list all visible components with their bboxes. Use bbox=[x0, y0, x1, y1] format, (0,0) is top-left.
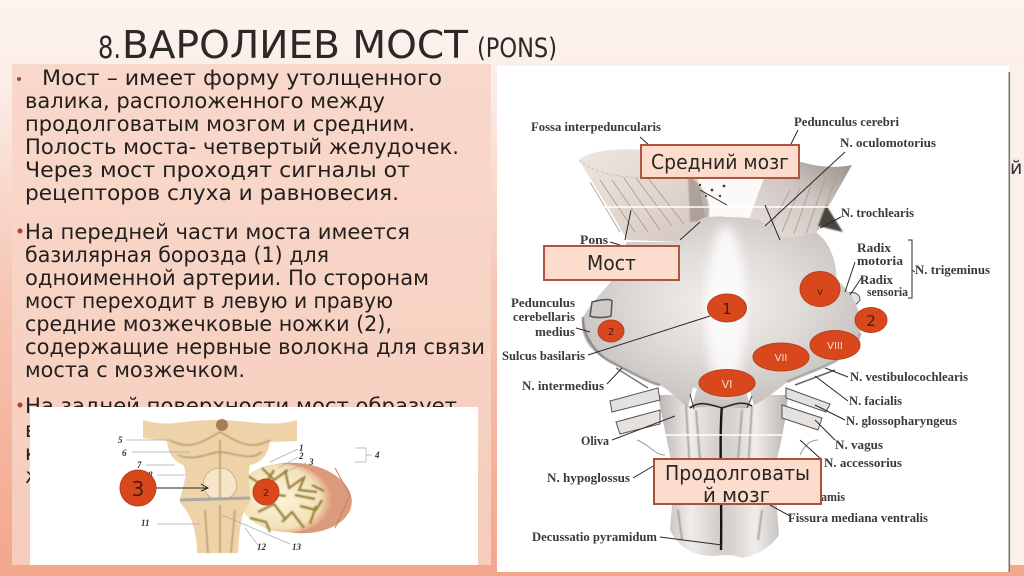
paragraph: posterior part: в bbox=[25, 418, 37, 442]
callout 2 right bbox=[855, 308, 887, 332]
latin labels: N. vestibulocochlearis bbox=[850, 369, 968, 384]
leader lines bbox=[576, 130, 915, 545]
number labels: 5 bbox=[118, 435, 123, 445]
paragraph: form of the pons: валика, расположенного между bbox=[25, 89, 385, 113]
latin labels: Radix bbox=[857, 240, 892, 255]
paragraph: anterior part: На передней части моста имеется bbox=[25, 220, 410, 244]
callout 2 bbox=[253, 479, 279, 505]
callout 2 left bbox=[598, 320, 624, 342]
panel: posterior brainstem image bbox=[30, 407, 478, 565]
number labels: 6 bbox=[122, 448, 127, 458]
label: pons bbox=[544, 246, 679, 280]
latin labels: N. oculomotorius bbox=[840, 135, 936, 150]
callout 2 left: 2 bbox=[608, 327, 614, 338]
number labels: 3 bbox=[308, 457, 314, 467]
paragraph: form of the pons: рецепторов слуха и равновесия. bbox=[25, 181, 399, 205]
latin labels: N. intermedius bbox=[522, 378, 604, 393]
paragraph: anterior part: моста с мозжечком. bbox=[25, 358, 245, 382]
latin labels: Fossa interpeduncularis bbox=[531, 119, 661, 134]
latin labels: N. accessorius bbox=[824, 455, 902, 470]
latin labels: Sulcus basilaris bbox=[502, 348, 585, 363]
number labels: 2 bbox=[298, 451, 304, 461]
number labels: 7 bbox=[137, 460, 142, 470]
cranial nerve roots bbox=[610, 292, 860, 455]
latin labels: sensoria bbox=[867, 284, 908, 299]
label: midbrain bbox=[641, 145, 799, 178]
label: medulla oblongata: Продолговаты bbox=[665, 461, 810, 485]
paragraph: posterior part bbox=[18, 394, 457, 488]
callout VI bbox=[699, 370, 755, 396]
paragraph: form of the pons: Через мост проходят сигналы от bbox=[25, 158, 410, 182]
latin labels: Radix bbox=[860, 272, 893, 287]
midbrain peduncles bbox=[579, 149, 852, 242]
paragraph: posterior part: На задней поверхности мост образует bbox=[25, 394, 457, 418]
latin labels: N. hypoglossus bbox=[547, 470, 630, 485]
paragraph: anterior part: одноименной артерии. По сторонам bbox=[25, 266, 429, 290]
paragraph: form of the pons: Мост – имеет форму утолщенного bbox=[42, 66, 442, 90]
paragraph: form of the pons: продолговатым мозгом и средним. bbox=[25, 112, 415, 136]
panel: description text bbox=[12, 64, 491, 565]
number labels bbox=[118, 435, 380, 552]
paragraph: anterior part bbox=[18, 220, 485, 382]
latin labels: medius bbox=[535, 324, 575, 339]
latin labels: Fissura mediana ventralis bbox=[788, 510, 928, 525]
paragraph: form of the pons: Полость моста- четвертый желудочек. bbox=[25, 135, 459, 159]
latin labels: motoria bbox=[857, 253, 904, 268]
callout V: v bbox=[817, 287, 823, 298]
paragraph: anterior part: содержащие нервные волокна для связи bbox=[25, 335, 485, 359]
paragraph: anterior part: мост переходит в левую и правую bbox=[25, 289, 393, 313]
callout VI: VI bbox=[722, 378, 732, 391]
latin labels bbox=[502, 114, 990, 544]
callout 2: 2 bbox=[263, 488, 269, 499]
paragraph: form of the pons bbox=[17, 66, 459, 205]
number labels: 12 bbox=[257, 542, 266, 552]
latin labels: Pedunculus cerebri bbox=[794, 114, 899, 129]
latin labels: Pedunculus bbox=[511, 295, 575, 310]
label: medulla oblongata bbox=[654, 459, 821, 507]
latin labels: Pons bbox=[580, 232, 608, 247]
latin labels: N. glossopharyngeus bbox=[846, 413, 957, 428]
callout VIII: VIII bbox=[827, 341, 843, 352]
callout VII bbox=[753, 343, 809, 371]
latin labels: Decussatio pyramidum bbox=[532, 529, 657, 544]
paragraph: anterior part: средние мозжечковые ножки (2), bbox=[25, 312, 392, 336]
callout 1 bbox=[708, 294, 746, 322]
latin labels: cerebellaris bbox=[513, 309, 575, 324]
latin labels: amis bbox=[821, 489, 845, 504]
number labels: 8 bbox=[148, 470, 153, 480]
title: 8. bbox=[98, 31, 121, 66]
callout V bbox=[800, 272, 840, 306]
clipped text fragment: й bbox=[1010, 157, 1022, 179]
cerebellum bbox=[235, 457, 355, 539]
callout 2 right: 2 bbox=[866, 312, 876, 330]
latin labels: N. facialis bbox=[849, 393, 902, 408]
medulla oblongata bbox=[658, 395, 788, 558]
title: (PONS) bbox=[477, 33, 557, 64]
latin labels: N. trigeminus bbox=[915, 262, 990, 277]
label: medulla oblongata: й мозг bbox=[703, 483, 770, 507]
callout 3 bbox=[120, 470, 156, 506]
callout 3: 3 bbox=[132, 477, 144, 501]
paragraph: posterior part: ж bbox=[25, 464, 44, 488]
number labels: 11 bbox=[141, 518, 150, 528]
white scan lines bbox=[590, 207, 830, 435]
paragraph: anterior part: базилярная борозда (1) для bbox=[25, 243, 329, 267]
latin labels: Oliva bbox=[581, 433, 609, 448]
latin labels: N. vagus bbox=[835, 437, 883, 452]
arrow bbox=[155, 484, 208, 491]
latin labels: N. trochlearis bbox=[841, 205, 914, 220]
callout 1: 1 bbox=[722, 300, 732, 318]
label: pons: Мост bbox=[587, 251, 636, 275]
pons bbox=[582, 216, 861, 409]
paragraph: posterior part: к bbox=[25, 441, 38, 465]
number labels: 4 bbox=[374, 450, 380, 460]
number labels: 13 bbox=[292, 542, 302, 552]
panel: anatomical diagram bbox=[497, 62, 1024, 576]
callout VIII bbox=[810, 330, 860, 360]
number labels: 1 bbox=[299, 443, 304, 453]
brainstem bbox=[143, 419, 297, 553]
callout VII: VII bbox=[775, 353, 787, 364]
title: ВАРОЛИЕВ МОСТ bbox=[122, 23, 469, 67]
label: midbrain: Средний мозг bbox=[651, 150, 789, 174]
